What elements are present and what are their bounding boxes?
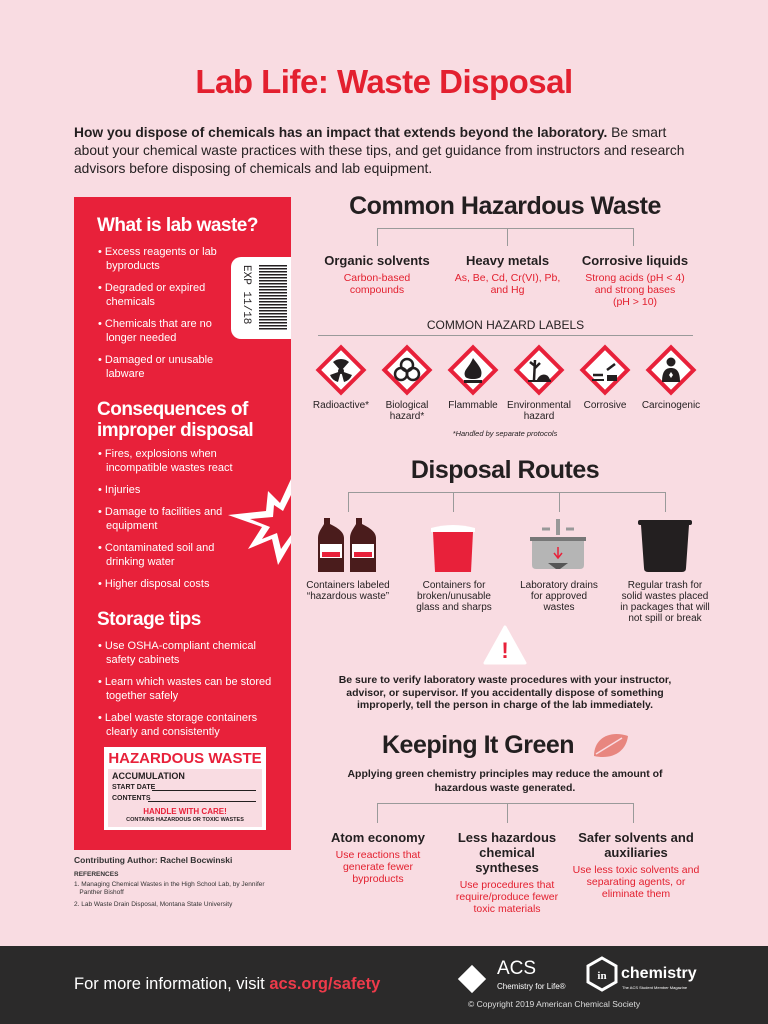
principle: atom economy bbox=[331, 830, 425, 885]
icon: carcinogenic bbox=[646, 344, 696, 396]
logo: ACS bbox=[458, 958, 566, 993]
category: corrosive liquids: (pH > 10) bbox=[613, 296, 657, 308]
logo: inchemistry: chemistry bbox=[621, 965, 697, 982]
principle: less hazardous syntheses bbox=[456, 830, 558, 915]
list: lab waste: • Excess reagents or lab byproducts bbox=[98, 246, 217, 272]
icon: hazardous waste label: CONTAINS HAZARDOUS OR TOXIC WASTES bbox=[126, 817, 244, 823]
connector lines bbox=[377, 228, 634, 246]
hazard pictograms: *Handled by separate protocols bbox=[453, 429, 557, 438]
principle: safer solvents: Safer solvents and auxiliaries bbox=[578, 830, 694, 860]
logo: inchemistry: in bbox=[597, 970, 607, 982]
category: corrosive liquids: Strong acids (pH < 4) bbox=[585, 272, 685, 284]
footer: more info: For more information, visit acs.org/safety bbox=[74, 975, 380, 993]
hazard pictograms: Biological bbox=[386, 400, 428, 411]
heading: storage tips: Storage tips bbox=[97, 609, 201, 630]
heading: disposal routes: Disposal Routes bbox=[411, 456, 599, 484]
heading: common hazard labels: COMMON HAZARD LABELS bbox=[427, 318, 584, 332]
hazard pictograms: Corrosive bbox=[584, 400, 626, 411]
icon: amber bottles bbox=[318, 518, 376, 572]
category: heavy metals: As, Be, Cd, Cr(VI), Pb, bbox=[455, 272, 560, 284]
icon: hazardous waste label bbox=[104, 747, 266, 830]
list: lab waste bbox=[98, 246, 217, 380]
icon: warning triangle: ! bbox=[501, 638, 509, 663]
hazard pictograms: hazard* bbox=[390, 411, 424, 422]
hazard pictograms: hazard bbox=[524, 411, 554, 422]
category: organic solvents: compounds bbox=[350, 284, 404, 296]
principle: less hazardous syntheses: Less hazardous chemical syntheses bbox=[458, 830, 556, 875]
hazard pictograms: Environmental bbox=[507, 400, 571, 411]
logo: inchemistry bbox=[586, 956, 697, 992]
heading: what is lab waste: What is lab waste? bbox=[97, 215, 258, 236]
principle: safer solvents bbox=[573, 830, 699, 900]
connector lines bbox=[348, 492, 666, 512]
warning text: Be sure to verify laboratory waste procedures with your instructor, advisor, or supervisor. If you accidentally dispose of something improperly, tell the person in charge of the lab immediately. bbox=[339, 674, 671, 711]
list: lab waste: • Chemicals that are no longer needed bbox=[98, 318, 212, 344]
list: consequences bbox=[98, 448, 233, 590]
icon: hazardous waste label: CONTENTS bbox=[112, 795, 150, 802]
text: Containers for broken/unusable glass and sharps bbox=[416, 580, 492, 613]
icon: hazardous waste label: ACCUMULATION bbox=[112, 771, 185, 781]
list: lab waste: • Degraded or expired chemicals bbox=[98, 282, 205, 308]
labels: Radioactive* bbox=[313, 400, 369, 411]
list: consequences: • Damage to facilities and equipment bbox=[98, 506, 222, 532]
hazard pictograms: Carcinogenic bbox=[642, 400, 700, 411]
list: consequences: • Higher disposal costs bbox=[98, 578, 209, 590]
list: lab waste: • Damaged or unusable labware bbox=[98, 354, 213, 380]
footer bbox=[0, 946, 768, 1024]
list: consequences: • Fires, explosions when incompatible wastes react bbox=[98, 448, 233, 474]
icon: expiry label bbox=[231, 257, 291, 339]
credits and references: REFERENCES bbox=[74, 870, 118, 878]
heading: common hazardous waste: Common Hazardous Waste bbox=[349, 192, 661, 220]
title: Lab Life: Waste Disposal bbox=[195, 63, 573, 100]
hazard pictograms: Flammable bbox=[448, 400, 498, 411]
category: organic solvents: Organic solvents bbox=[324, 253, 430, 268]
icon: biohazard bbox=[382, 344, 432, 396]
principle: safer solvents: Use less toxic solvents and separating agents, or eliminate them bbox=[573, 864, 699, 900]
category: organic solvents bbox=[324, 253, 430, 296]
text: Laboratory drains for approved wastes bbox=[520, 580, 598, 613]
heading: consequences: Consequences of improper disposal bbox=[97, 399, 253, 441]
logo: inchemistry: The ACS Student Member Magazine bbox=[622, 985, 687, 990]
icon: hazardous waste label: HANDLE WITH CARE! bbox=[143, 807, 227, 816]
credits and references: 1. Managing Chemical Wastes in the High School Lab, by Jennifer bbox=[74, 881, 265, 888]
credits and references: Contributing Author: Rachel Bocwinski bbox=[74, 855, 232, 865]
intro text: How you dispose of chemicals has an impact that extends beyond the laboratory. Be smart about your chemical waste practices with these tips, and get guidance from instructors and research advisors before disposing of chemicals and lab equipment. bbox=[74, 125, 684, 176]
icon: expiry label: EXP 11/18 bbox=[240, 265, 252, 324]
connector lines bbox=[377, 803, 634, 823]
icon: warning triangle bbox=[484, 626, 526, 664]
icon: radioactive bbox=[316, 344, 366, 396]
category: corrosive liquids: Corrosive liquids bbox=[582, 253, 688, 268]
category: heavy metals bbox=[454, 253, 560, 296]
hazard pictograms bbox=[313, 344, 700, 438]
list: storage tips: • Use OSHA-compliant chemical safety cabinets bbox=[98, 640, 256, 666]
icon: flammable bbox=[448, 344, 498, 396]
category: organic solvents: Carbon-based bbox=[344, 272, 410, 284]
list: storage tips bbox=[98, 640, 271, 738]
text: Regular trash for solid wastes placed in packages that will not spill or break bbox=[620, 580, 710, 624]
icon: hazardous waste label: HAZARDOUS WASTE bbox=[108, 750, 262, 767]
credits and references: Panther Bishoff bbox=[79, 889, 124, 896]
icon: trash bin bbox=[638, 520, 692, 572]
category: corrosive liquids bbox=[582, 253, 688, 308]
green intro text: Applying green chemistry principles may reduce the amount of hazardous waste generated. bbox=[347, 768, 663, 794]
panel: red sidebar bbox=[74, 197, 291, 850]
icon: sharps container bbox=[431, 525, 475, 572]
heading: keeping it green: Keeping It Green bbox=[382, 731, 574, 759]
category: heavy metals: Heavy metals bbox=[466, 253, 549, 268]
logo: ACS: Chemistry for Life® bbox=[497, 982, 566, 991]
list: consequences: • Contaminated soil and drinking water bbox=[98, 542, 214, 568]
icon: explosion burst bbox=[228, 479, 291, 565]
credits and references: 2. Lab Waste Drain Disposal, Montana State University bbox=[74, 901, 232, 908]
logo: ACS: ACS bbox=[497, 958, 536, 979]
list: storage tips: • Learn which wastes can be stored together safely bbox=[98, 676, 271, 702]
route labels: Containers labeled “hazardous waste” bbox=[306, 580, 390, 602]
icon: leaf bbox=[594, 734, 628, 757]
category: corrosive liquids: and strong bases bbox=[595, 284, 675, 296]
principle: atom economy: Atom economy bbox=[331, 830, 425, 845]
list: consequences: • Injuries bbox=[98, 484, 140, 496]
icon: corrosive bbox=[580, 344, 630, 396]
icon: hazardous waste label: START DATE bbox=[112, 784, 155, 791]
list: storage tips: • Label waste storage containers clearly and consistently bbox=[98, 712, 257, 738]
icon: environmental bbox=[514, 344, 564, 396]
icon: sink bbox=[530, 519, 586, 569]
principle: less hazardous syntheses: Use procedures that require/produce fewer toxic materials bbox=[456, 879, 558, 915]
principle: atom economy: Use reactions that generate fewer byproducts bbox=[336, 849, 420, 885]
category: heavy metals: and Hg bbox=[491, 284, 524, 296]
credits and references bbox=[74, 855, 265, 908]
copyright: © Copyright 2019 American Chemical Society bbox=[468, 999, 640, 1009]
